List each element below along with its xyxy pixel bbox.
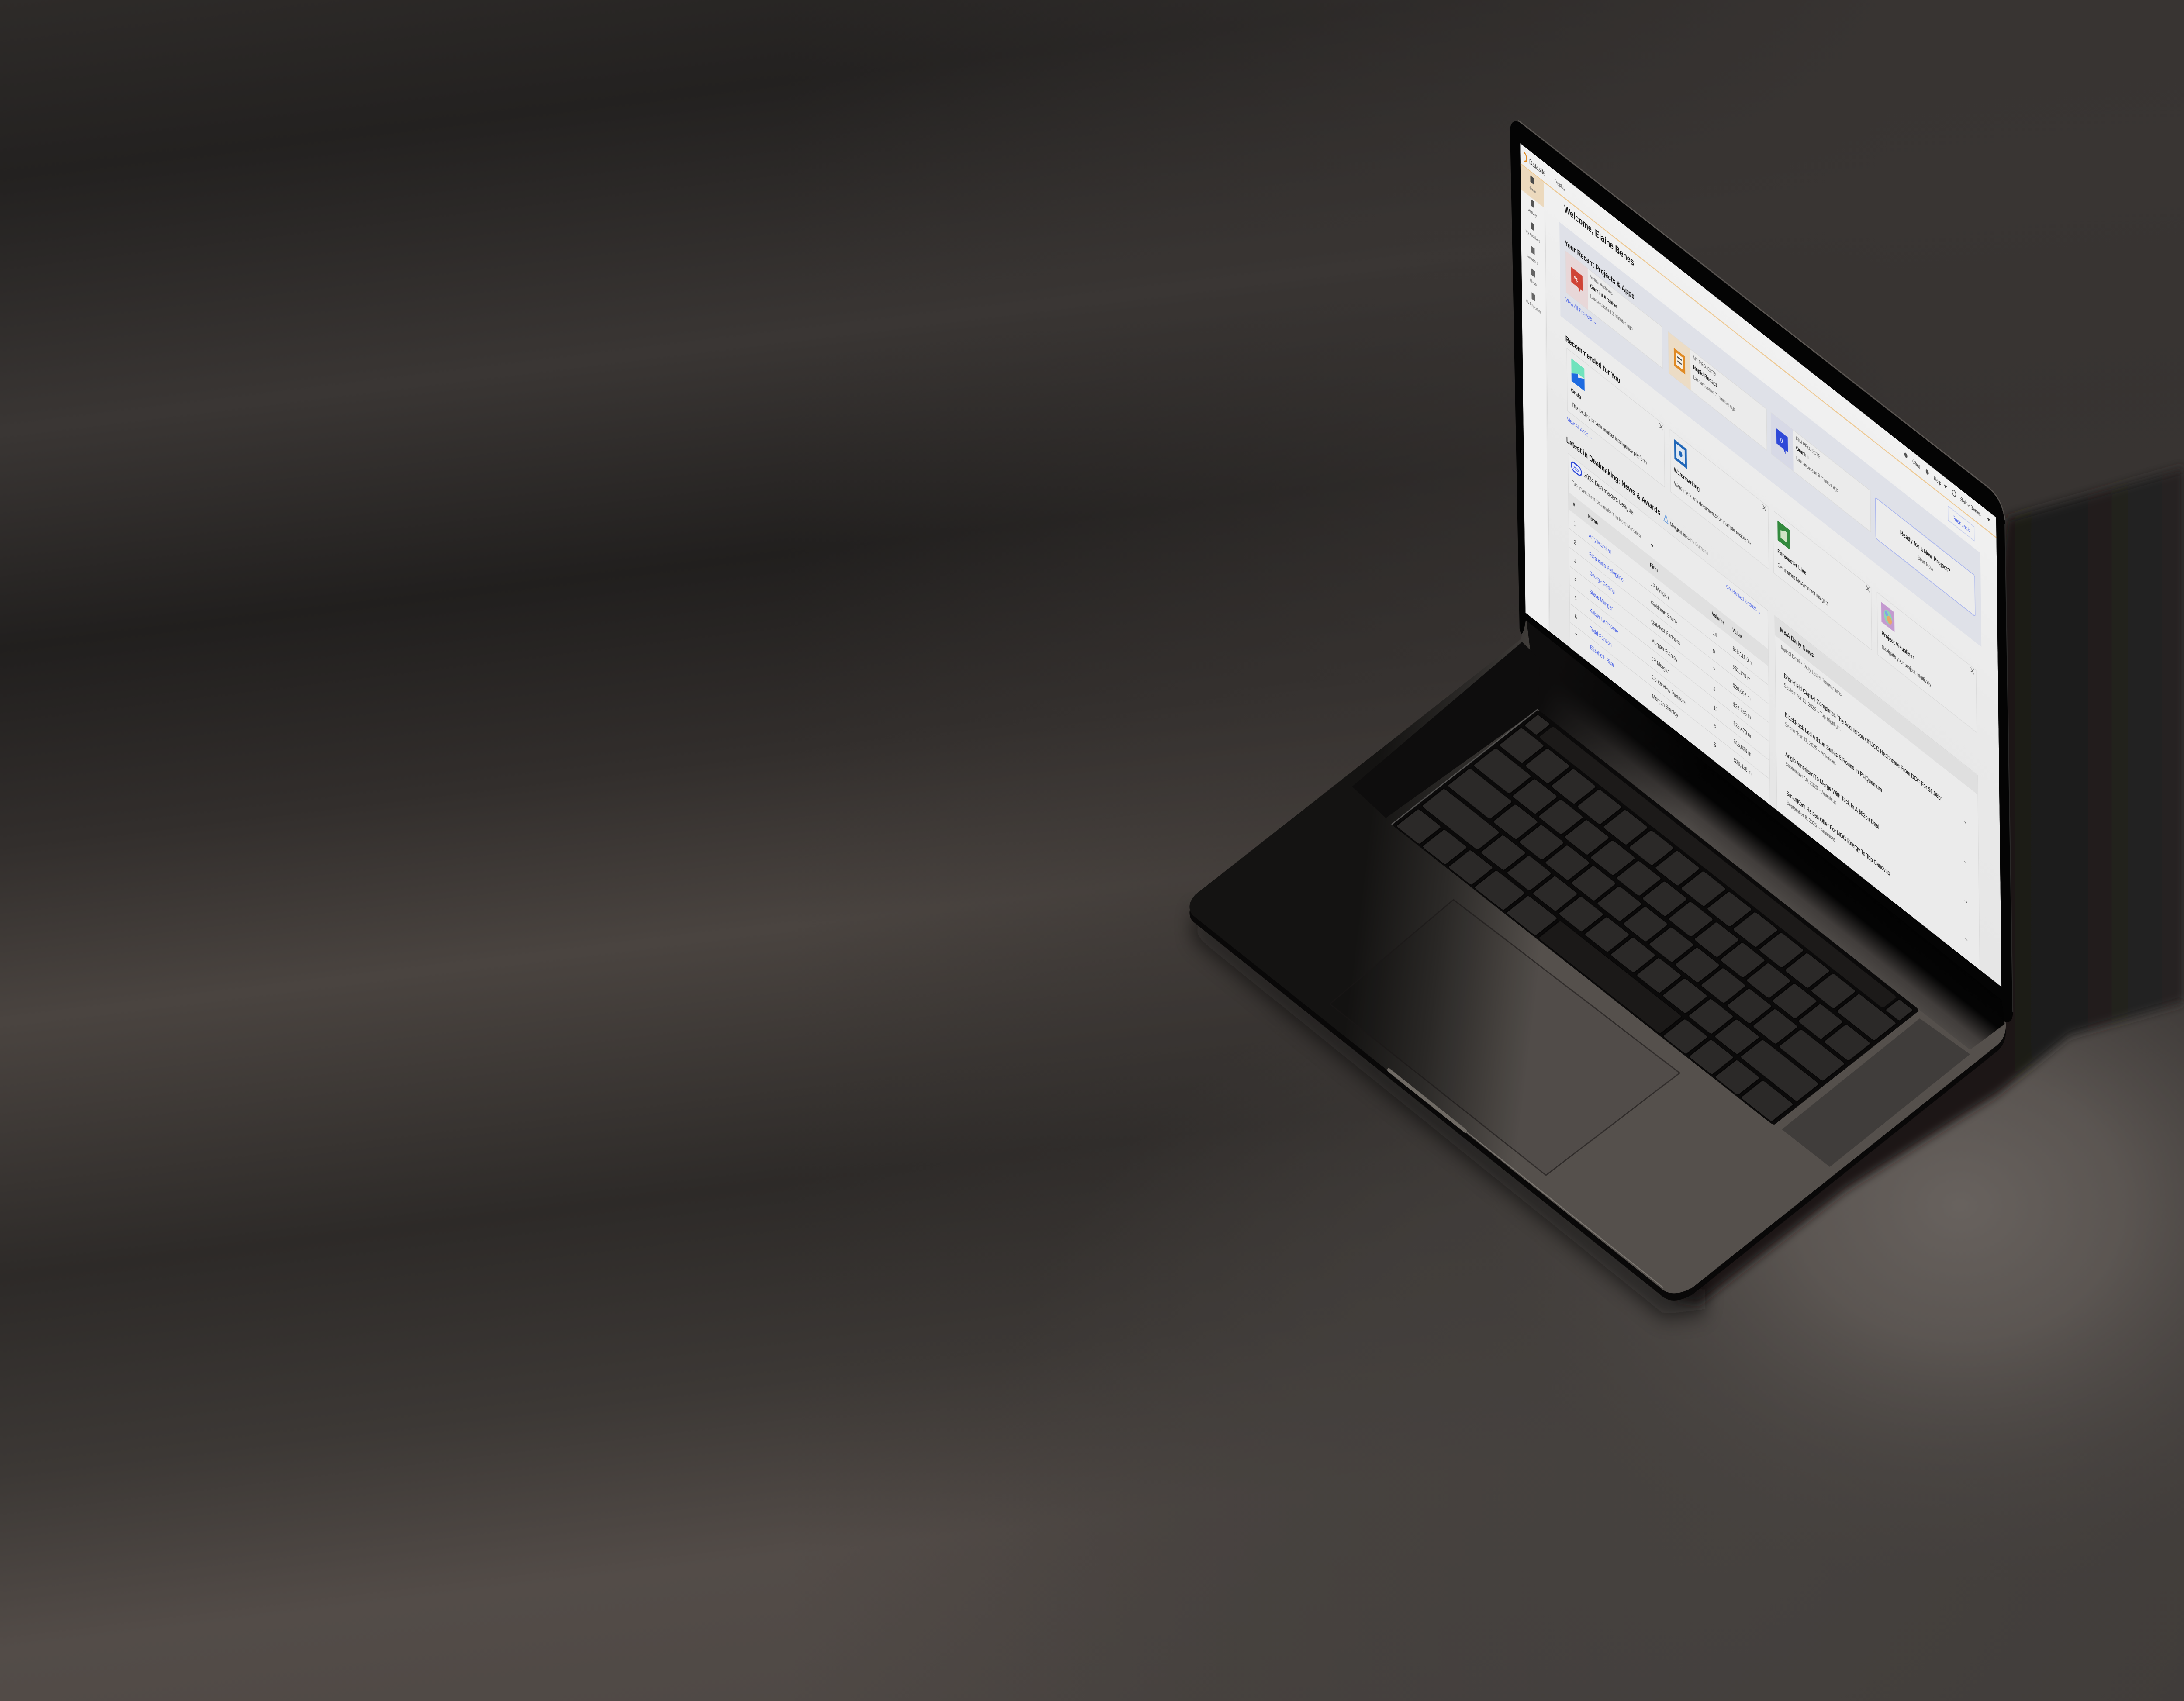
table rows: 5 [1714, 741, 1716, 749]
recommended card: watermarking: Watermarking [1674, 466, 1700, 493]
sidebar item activity: Activity [1528, 207, 1537, 219]
table rows: Goldman Sachs [1651, 599, 1677, 626]
news item 3 [1785, 750, 1968, 910]
news item 4: September 8, 2025 – Americas [1787, 799, 1835, 844]
table header: Firm [1650, 562, 1658, 574]
table rows: Kaiser Lanthorne [1590, 606, 1618, 635]
table rows: 8 [1714, 722, 1716, 730]
sidebar item solutions [1527, 243, 1539, 267]
sidebar item activity [1528, 197, 1537, 219]
panel title: 2024 Dealmakers League [1584, 470, 1634, 517]
function rail [1524, 714, 1914, 1021]
recommended card: grata: Grata [1571, 386, 1582, 401]
table rows: $48,111.0 m [1732, 645, 1753, 667]
recent card: rapid redact [1668, 332, 1767, 450]
recommended card: watermarking: Watermark any documents for multiple recipients [1674, 480, 1752, 547]
table rows: 3 [1574, 557, 1576, 565]
icon: forecaster [1777, 521, 1790, 550]
header rule [1521, 163, 1997, 538]
table rows: Centerview Partners [1652, 673, 1686, 707]
laptop base underside edge [1189, 645, 2006, 1301]
panel subtitle: Top Investment Dealmakers in North America [1572, 480, 1641, 539]
news subtitle: Topical Details Daily Latest Transactions [1780, 644, 1842, 698]
recent card: rapid redact: Rapid Redact [1693, 363, 1717, 389]
icon: orange document [1674, 348, 1685, 374]
trackpad [1330, 900, 1679, 1175]
table rows: 10 [1714, 704, 1718, 714]
key row 5 with space bar [1396, 808, 1794, 1122]
news item 3: → [1963, 895, 1968, 906]
news header band [1775, 616, 1977, 794]
right lid edge sliver [2005, 524, 2013, 1012]
table header: Volume [1712, 610, 1724, 627]
table rows: 4 [1574, 576, 1576, 584]
left sidebar [1521, 164, 1549, 631]
news title: M&A Daily News [1780, 625, 1814, 659]
table header: # [1573, 501, 1575, 509]
front edge highlight [1466, 1132, 1663, 1287]
news item 4: SmartKem Raises Offer For NOG Energy To Top Cenovus [1787, 789, 1890, 877]
sidebar item my reporting: My Reporting [1526, 298, 1541, 315]
recent card: gemini archive: Gemini Archive [1590, 283, 1617, 311]
sidebar item my archives: My Archives [1525, 228, 1540, 244]
app header [1520, 149, 1997, 538]
table rows: $25,470 m [1733, 719, 1751, 740]
recent card: gemini: Gemini [1796, 444, 1809, 461]
table header [1569, 493, 1768, 666]
sidebar item my reporting [1525, 287, 1541, 315]
news item 4: → [1964, 933, 1968, 944]
table header: Name [1588, 513, 1598, 527]
laptop lid and bezel [1510, 121, 2013, 1022]
logo mark [1524, 152, 1527, 163]
key row 4 [1421, 788, 1820, 1102]
sidebar item my archives [1525, 217, 1540, 244]
table rows: $20,668 m [1733, 682, 1751, 702]
laptop [1189, 121, 2013, 1301]
table rows: 7 [1575, 631, 1577, 640]
sidebar item home [1528, 174, 1536, 195]
news item 2 [1785, 711, 1967, 870]
recent projects band [1559, 222, 1981, 647]
table rows: 7 [1713, 666, 1715, 674]
table rows: 5 [1713, 685, 1715, 693]
welcome heading: Welcome, Elaine Benes [1564, 203, 1634, 269]
table rows: Amy Marshall [1589, 531, 1611, 556]
lid rim highlight [1518, 121, 2005, 520]
badge [1571, 461, 1582, 477]
help link: Help [1934, 475, 1941, 487]
keyboard well [1392, 709, 1920, 1125]
right speaker grille [1782, 1018, 1970, 1167]
table rows: 1 [1574, 520, 1576, 528]
recommended card: forecaster live: Get instant M&A market insights [1778, 562, 1828, 607]
table rows: Morgan Stanley [1652, 692, 1678, 719]
left speaker area [1352, 642, 1540, 818]
recent card: gemini archive: Last accessed 3 minutes ago [1590, 293, 1633, 332]
recent card: gemini: Last accessed 8 minutes ago [1796, 455, 1838, 494]
news item 2: → [1963, 856, 1967, 866]
table rows: 6 [1575, 613, 1577, 621]
recent card: gemini: IRM PROJECTS [1796, 435, 1820, 460]
latest in dealmaking heading: Latest in Dealmaking: News & Awards [1566, 435, 1660, 518]
recent card: gemini: 0 [1780, 436, 1783, 445]
feedback button: Feedback [1952, 514, 1970, 534]
icon: watermarking [1674, 439, 1687, 469]
table rows: Stephanie Pellegrino [1589, 550, 1624, 584]
table rows: Morgan Stanley [1652, 636, 1678, 663]
sidebar item news [1530, 267, 1537, 287]
dealmakers league panel [1568, 453, 1770, 808]
profile link: Elaine Benes [1959, 495, 1981, 518]
recommended card: grata: The leading private market intelligence platform [1572, 401, 1647, 466]
header nav item: Display [1555, 178, 1565, 192]
table rows: 2 [1574, 538, 1576, 546]
profile link [1952, 489, 1990, 525]
recommended card: project visualiser: Navigate your project intuitively [1882, 643, 1931, 688]
recommended card: grata [1567, 348, 1665, 487]
recent card: rapid redact: MY PROJECTS [1693, 354, 1716, 378]
table rows: JP Morgan [1651, 580, 1669, 601]
screen content [1520, 143, 2001, 994]
news item 3: September 10, 2025 – Americas [1786, 760, 1837, 807]
news item 1: September 11, 2025 – Top Highlight [1784, 682, 1841, 733]
table rows: JP Morgan [1652, 655, 1669, 676]
help link [1926, 469, 1947, 491]
icon: grata [1571, 359, 1585, 391]
new project call to action: Ready for a New Project? [1900, 528, 1950, 575]
laptop base top surface [1189, 613, 2006, 1293]
recommended heading: Recommended for You [1565, 334, 1621, 386]
table rows: Qatalyst Partners [1651, 618, 1680, 647]
laptop cast shadow on the floor behind the lid [1674, 468, 2184, 1304]
new project call to action [1875, 497, 1975, 616]
recommended card: forecaster live [1773, 511, 1872, 650]
recent card: gemini archive: Ag [1573, 273, 1578, 284]
table rows: $36,436 m [1734, 756, 1752, 777]
table rows: Elizabeth Rice [1590, 643, 1614, 669]
recent card: gemini archive: Virtual Archives [1590, 273, 1613, 297]
key row 2 [1473, 748, 1871, 1062]
table rows: 14 [1713, 629, 1717, 639]
table rows: 9 [1713, 647, 1715, 656]
table rows: $51,179 m [1733, 663, 1750, 683]
recent card: gemini [1771, 413, 1871, 532]
recommended card: watermarking [1670, 429, 1769, 569]
front notch highlight [1389, 1070, 1465, 1131]
table rows [1569, 516, 1769, 791]
news item 1: → [1963, 816, 1967, 826]
hinge band left fade [1526, 613, 2004, 1050]
sidebar item solutions: Solutions [1527, 253, 1539, 267]
key row 3 [1447, 768, 1845, 1082]
keyboard well highlight edge [1392, 709, 1538, 825]
get ranked link: Get Ranked for 2025 → [1726, 583, 1761, 616]
hinge band reflecting dark below the screen [1526, 613, 2004, 1050]
table header: Value [1732, 626, 1742, 640]
active home tab [1521, 164, 1544, 207]
news item 2: September 11, 2025 – Americas [1785, 721, 1836, 767]
chat link [1904, 452, 1920, 470]
recent card: rapid redact: Last accessed 7 minutes ago [1693, 374, 1735, 413]
news item 4 [1787, 789, 1968, 949]
icon: blue document [1776, 428, 1788, 456]
news item 3: Anglo American To Merge With Teck In A $53bn Deal [1785, 750, 1879, 831]
news item 2: BlackRock Led A $1bn Series E Round In PsiQuantum [1785, 711, 1882, 794]
contact shadow along front edge of laptop [1192, 913, 1705, 1315]
icon: red document [1571, 267, 1583, 295]
table rows: Todd Sanson [1590, 625, 1612, 649]
M&A daily news panel [1775, 615, 1980, 977]
keyboard [1392, 709, 1920, 1125]
table rows: 5 [1575, 594, 1577, 603]
feedback button [1948, 506, 1974, 541]
table rows: George Gotting [1590, 569, 1615, 595]
news item 1: Brookfield Capital Completes The Acquisition Of DCC Healthcare From DCC For $1.06bn [1784, 672, 1943, 804]
recommended card: project visualiser: Project Visualiser [1882, 629, 1914, 661]
icon: project visualiser [1881, 602, 1894, 632]
sidebar item home: Home [1529, 184, 1536, 195]
recent card: gemini archive [1565, 251, 1662, 368]
recommended card: forecaster live: Forecaster Live [1777, 547, 1806, 576]
screen background [1520, 143, 2001, 987]
new project call to action: Start Now [1918, 554, 1933, 573]
badge: 2024 [1573, 465, 1579, 474]
view all apps link: View All Apps → [1567, 415, 1593, 442]
table rows: Steve Munger [1590, 587, 1613, 612]
logo wordmark: Datasite [1529, 158, 1546, 178]
chat link: Chat [1912, 458, 1920, 470]
sidebar item news: News [1530, 277, 1537, 287]
view all projects link: View All Projects → [1565, 296, 1597, 327]
recent projects heading: Your Recent Projects & Apps [1565, 238, 1635, 301]
recommended card: project visualiser [1877, 592, 1977, 732]
mergerlinks attribution: MergerLinks by Datasite [1670, 521, 1708, 557]
table rows: $16,636 m [1734, 738, 1751, 758]
key row 1 [1498, 727, 1897, 1041]
table rows: $26,836 m [1733, 700, 1751, 721]
